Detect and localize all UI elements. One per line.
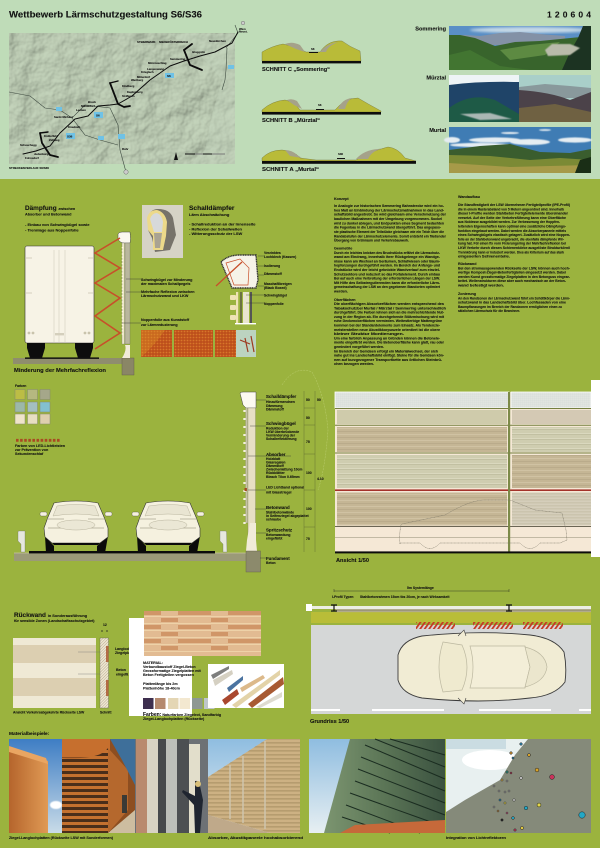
section label B: SCHNITT B „Mürztal“ bbox=[262, 118, 320, 124]
dimension lines: 50 bbox=[317, 398, 321, 402]
text block: Konzept: nen auf kurzgezogener Transportkette aus örtlichen Steinbrü- bbox=[334, 358, 443, 362]
dimension: Systemlänge bbox=[332, 586, 509, 599]
chart: Schnitt B Mürztal bbox=[262, 98, 381, 124]
annotation: wall labels: Mehrfache Reflexion zwischen bbox=[141, 290, 195, 294]
text block: Konzept: mente eingefärbt werden. Die Betonoberfläche kann glatt, rau oder bbox=[334, 341, 445, 345]
place names: Judenburg bbox=[34, 152, 49, 156]
section: rear wall: 12 bbox=[103, 623, 107, 627]
annotation: wall layers: Rückblätter bbox=[266, 471, 285, 475]
text block: Konzept: nisse kann am Wechsel an Geräumen, Schlafwiesen oder Baum- bbox=[334, 259, 441, 263]
bollards bbox=[18, 531, 227, 552]
chart: Schnitt C Sommering bbox=[262, 41, 361, 73]
text block: Konzept: kommen bei der Standardelemente zum Einsatz. Als Tendenzie- bbox=[334, 324, 441, 328]
text block: Wandaufbau: dieser I-Profile werden Stahlbeton Fertigteilelemente übereinander bbox=[458, 212, 569, 216]
panel: material: Grossformatige Ziegelplatten mit bbox=[143, 669, 202, 673]
chart: Schnitt A Murtal bbox=[262, 147, 416, 173]
heading: Rückwand bbox=[14, 612, 95, 623]
road slab bbox=[13, 357, 134, 375]
place names bbox=[20, 39, 226, 160]
place names: Wartberg bbox=[131, 78, 143, 82]
text block: Konzept: wird zu dunkel ablegen, und Endpunkten eines Segment bedachten bbox=[333, 221, 445, 225]
text block: Wandaufbau: werden Kunst grossformatige Ziegelplatten in den Betonguss eingear- bbox=[457, 275, 571, 279]
text block: Konzept: gemeinschaftung der LSW an den gegebenen Standorten optimiert bbox=[334, 285, 441, 289]
annotation: wall layers: Absorber bbox=[266, 452, 286, 457]
text block: Wandaufbau: Zonierung bbox=[458, 292, 476, 296]
thin roads bbox=[9, 25, 238, 172]
place names: Bruck bbox=[88, 100, 96, 104]
section: rear wall: Beton bbox=[116, 668, 126, 672]
panel: material: Plattenhöhe 18-40cm bbox=[143, 686, 181, 690]
text block: Wandaufbau: Die Standfestigkeit der LSW übernehmen Fertigteilprofile (IPE-Profil) bbox=[458, 203, 571, 207]
car top view bbox=[398, 630, 566, 704]
text block: Konzept: Geometrie bbox=[334, 246, 352, 250]
text block: Konzept: schaftsbild angestrebt. So wird gleichsam eine Verschmelzung der bbox=[334, 213, 447, 217]
annotation: wall labels: Noppenfolie aus Kunststoff bbox=[141, 318, 190, 322]
photo: green louvres bbox=[309, 739, 445, 833]
place names: Gloggnitz bbox=[192, 50, 205, 54]
place names: Langenwang bbox=[147, 67, 164, 71]
text block: Wandaufbau: folie an der Stahlbetonwand angebracht, die ebenfalls dämpfende Wir- bbox=[458, 237, 565, 241]
annotation: wall layers: Beton bbox=[266, 561, 276, 565]
elevation: Ansicht 1/50 bbox=[335, 392, 591, 553]
panel: material: Verbundbaustoff Ziegel-Beton bbox=[143, 665, 196, 669]
route badges: S6 bbox=[96, 114, 100, 118]
annotation: wall layers: Dämmstoff bbox=[266, 464, 285, 468]
text block: Wandaufbau: Rückwand bbox=[458, 262, 477, 266]
place names: Scheuchegg bbox=[20, 143, 37, 147]
text block: Konzept: zung in der Region ab. Ein durchgehende Stützmischung wird mit bbox=[334, 315, 445, 319]
annotation: wall layers: Betonwand bbox=[266, 505, 290, 510]
detail: damper section bbox=[216, 255, 258, 324]
text block: Wandaufbau: aus Noblesse ausgebildet werden. Zur Verbesserung der Hoppfen- bbox=[458, 220, 561, 224]
project number: 120604 bbox=[547, 10, 591, 20]
caption: Grundriss: Grundriss 1/50 bbox=[310, 719, 349, 725]
dimension lines: 75 bbox=[306, 440, 310, 444]
text block: Wandaufbau: LKW Verkehr durch diesen Schienenkörbe ausgelöste Strukturkörnil bbox=[458, 246, 570, 250]
heading: Schalldämpfer: Schalldämpfer bbox=[189, 205, 235, 212]
text block: Wandaufbau: kung hat. Für einen fix vorn Fixierungsring der Mehrfachreflexion bei bbox=[458, 242, 566, 246]
I-profile posts bbox=[331, 605, 512, 611]
text block: Wandaufbau: An den Randzonen der Lärmschutzwand führt ein Schüttkörper die Lärm- bbox=[458, 296, 571, 300]
annotation: wall layers: Schallreflektierung bbox=[266, 437, 297, 441]
heading: Rückwand: für sensible Zonen (Landschaftsschutzgebiet) bbox=[14, 619, 95, 623]
route badges: S36 bbox=[67, 134, 73, 138]
section: rear wall bbox=[100, 623, 131, 714]
annotation: wall layers: in Seifenziegel abgeplattet bbox=[266, 514, 309, 518]
annotation: wall labels: Schwingbügel zur Minderung bbox=[141, 278, 192, 282]
text block: Wandaufbau: beitet. Wellenstrukturen diese aber auch mechanisch an der Beton- bbox=[458, 279, 567, 283]
car front 2 bbox=[132, 501, 204, 553]
panel: header band bbox=[0, 0, 600, 179]
annotation: damper labels: Lochblech (Kassen) bbox=[264, 255, 296, 259]
dimension lines: 50 bbox=[306, 398, 310, 402]
map caption: STRECKENVERLAUF S6/S36 bbox=[9, 166, 49, 170]
text block: Konzept: die Fugenbau in die Lärmschutzwand übergeführt. Das angepass- bbox=[334, 226, 442, 230]
map endpoint: Graz bbox=[124, 170, 128, 174]
dimension lines: 50 bbox=[306, 416, 310, 420]
panel: material bbox=[129, 618, 202, 716]
chart: Schnitt C Sommering: S6 bbox=[311, 47, 315, 51]
map endpoint: Wien bbox=[239, 21, 248, 34]
place names: St.Marein bbox=[122, 94, 135, 98]
text block: Konzept: Oberflächen bbox=[334, 298, 356, 302]
text block: Wandaufbau: Wandaufbau bbox=[458, 195, 481, 199]
annotation: wall layers: LKW überbrückende bbox=[266, 430, 299, 434]
annotation: wall layers: Spritzschutz bbox=[266, 528, 293, 532]
heading: Schalldämpfer bbox=[189, 205, 256, 236]
text block: Konzept: nahe gut ins Landschaftsbild einfügt. Steine für die Gemüsen kön- bbox=[334, 354, 445, 358]
heading: Dämpfung: - Trennlage aus Noppenfolie bbox=[25, 228, 79, 232]
annotation: wall layers: Reduktion der bbox=[266, 426, 289, 430]
annotation: wall layers: mit Glasstriegel bbox=[266, 490, 291, 494]
route badges: S6 bbox=[167, 74, 171, 78]
caption: Absorber: Absorber, Akustikpaneele hochabsorbierend bbox=[208, 836, 303, 840]
text block: Konzept: meisterstellen neue Akustikkorpuszele orientiert ist die obere bbox=[334, 328, 440, 332]
annotation: wall layers: Dämmung bbox=[266, 404, 283, 408]
swatches: brick colours: Ziegel-Langlochplatten (Rückseite) bbox=[143, 717, 205, 721]
LED light strip key: Sekundenschlaf bbox=[15, 452, 44, 456]
annotation: wall layers: Stahlbetonwände bbox=[266, 510, 294, 514]
annotation: damper labels: Noppenfolie bbox=[264, 302, 284, 306]
LED light strip key: Farben von LED-Lichtleisten bbox=[15, 444, 66, 448]
text block: Wandaufbau: funktion eingebaut werden. Dabei werden die Absorberpaneele mittels bbox=[458, 229, 566, 233]
annotation: wall layers: Schwingbügel bbox=[266, 421, 296, 426]
text block: Wandaufbau: die in einem Rasterabstand von 5 Metern angeordnet sind. Innerhalb bbox=[458, 207, 565, 211]
annotation: wall layers: Hinzufürmendnen bbox=[266, 400, 295, 404]
annotation: wall layers: schraube bbox=[266, 518, 281, 522]
heading: Schalldämpfer: Lärm Abschwächung bbox=[189, 212, 230, 217]
lane markings bbox=[311, 709, 591, 711]
section label A: SCHNITT A „Murtal“ bbox=[262, 167, 319, 173]
color swatches: Farben: Farben bbox=[15, 384, 26, 388]
text block: Konzept: werden. bbox=[333, 290, 348, 294]
text block: Wandaufbau: sätzlichen Lärmschutz für die Bewohner. bbox=[458, 309, 520, 313]
chart: Schnitt A Murtal: S36 bbox=[338, 152, 343, 156]
text block: Konzept: gemindert vorgeführt werden. bbox=[334, 345, 384, 349]
label: Mürztal: Mürztal bbox=[426, 76, 446, 82]
annotation: wall layers: Dämmstoff bbox=[266, 408, 285, 412]
swatches: brick colours bbox=[143, 698, 221, 721]
map endpoint: Wien: Wien bbox=[239, 27, 246, 31]
label: Sommering: Sommering bbox=[415, 26, 447, 32]
place names: Kraubath bbox=[68, 125, 81, 129]
annotation: wall layers bbox=[248, 394, 309, 565]
photo: tan absorber wall bbox=[208, 739, 300, 833]
photo: brick louvres bbox=[62, 739, 135, 833]
heading: Dämpfung bbox=[25, 205, 90, 232]
panel: material: Beton Fertigteilen vergossen bbox=[143, 673, 195, 677]
text block: Wandaufbau: Trennkörung kann er induziert werden. Dies als Kriterium auf das stark bbox=[458, 250, 565, 254]
place names: Fohnsdorf bbox=[25, 156, 39, 160]
text block: Konzept: ruhe Deckenoberflächen vermieden. Weitestlerbige Mattengrüne bbox=[334, 319, 442, 323]
place names: Niklasdorf bbox=[81, 104, 95, 108]
photo: facade with light points bbox=[446, 739, 591, 833]
text block: Wandaufbau: wand befestigt werden. bbox=[457, 284, 504, 288]
annotation: wall layers: Fundament bbox=[266, 556, 290, 561]
wall section full height bbox=[240, 392, 260, 572]
annotation: wall layers: Bleach Tilon 0.65mm bbox=[266, 475, 300, 479]
annotation: wall layers: Schalldämpfer bbox=[266, 394, 297, 399]
annotation: wall labels bbox=[122, 278, 195, 327]
annotation: damper labels: Maschafilbreigen bbox=[264, 282, 292, 286]
annotation: damper labels: (Black Boxed) bbox=[264, 286, 287, 290]
place names: NIEDERÖSTERREICH bbox=[159, 39, 188, 44]
place names: Leoben bbox=[76, 108, 86, 112]
chart: Schnitt B Mürztal: S6 bbox=[318, 103, 322, 107]
dimension lines: 4.00 bbox=[317, 477, 324, 481]
photo: Sommering bbox=[449, 26, 591, 70]
photo: brick elements bbox=[208, 664, 284, 708]
text block: Wandaufbau: Baumpflanzungen im Bereich der Randzonen ermöglichen einen zu bbox=[458, 305, 563, 309]
section: rear wall: Langloch bbox=[115, 647, 131, 651]
place names: Kindberg bbox=[122, 84, 135, 88]
place names: Mürzzuschlag bbox=[148, 61, 167, 65]
red hatched zones bbox=[416, 622, 563, 629]
annotation: damper labels bbox=[246, 251, 296, 306]
dimension lines: 100 bbox=[306, 507, 312, 511]
text block: Wandaufbau: wertige Kompost-Ziegel-Betonfertigteilen eingesetzt werden. Dabei bbox=[457, 271, 566, 275]
annotation: wall layers: LED Lichtband optional bbox=[266, 486, 304, 490]
place names: STEIERMARK bbox=[137, 40, 156, 44]
annotation: wall layers: Zwischenlattung 10cm bbox=[266, 468, 302, 472]
heading: Dämpfung: Dämpfung zwischen bbox=[25, 205, 76, 212]
text block: Konzept: ste plastische Element der Teilstücke gleichsam wie ein Teich über die bbox=[334, 230, 444, 234]
text block: Konzept: wand am Eindrang, innerhalb ihrer Rückgelenge ein Wandge- bbox=[333, 255, 441, 259]
text block: Konzept: hopfenzungen durchgeführt werden. Im Bereich der Anfangs- und bbox=[334, 264, 441, 268]
LED light strip key bbox=[15, 440, 66, 456]
place names: Sankt Michael bbox=[54, 115, 73, 119]
caption: Integration: Integration von Lichtreflektoren bbox=[446, 836, 506, 840]
text block: Konzept: Mit Hilfe des Selbstregulierenden kann die erforderliche Lärm- bbox=[334, 281, 441, 285]
annotation: wall layers: Betonwandung bbox=[266, 533, 290, 537]
noise wall section bbox=[118, 232, 130, 358]
text block: Wandaufbau: Bei den stromausgewenden Rückseite der LSW, können auch hoch- bbox=[458, 266, 571, 270]
list: - Einbau von Schwingbügel sowie bbox=[25, 222, 90, 227]
route badges bbox=[56, 65, 234, 140]
place names: Semmering bbox=[170, 57, 186, 61]
road base: section bbox=[14, 551, 246, 561]
place names: Kapfenberg bbox=[127, 90, 143, 94]
swatches: brick colours: Farben: Naturfarben Ziegelrot, Sandfarbig bbox=[143, 712, 221, 718]
text block: Konzept: Bei auf auch eine Verbreitung der erforderlichen Längen der LSW. bbox=[334, 277, 440, 281]
annotation: wall labels: zur Lärmreduzierung bbox=[141, 323, 178, 327]
heading: Schalldämpfer: - Reflexion der Schallwellen bbox=[189, 226, 242, 232]
text block: Konzept: kleiner Struktur Montierungen. bbox=[334, 332, 404, 336]
caption: Ziegel: Ziegel-Langlochplatten (Rückseite LSW mit Sonderformen) bbox=[9, 836, 113, 840]
heading: Schalldämpfer: - Witterungsschutz der LSW bbox=[189, 231, 243, 236]
dimension lines bbox=[304, 391, 324, 552]
text block: Konzept: hes Maß an Einbindung der Lärmschutzmaßnahmen in das Land- bbox=[334, 208, 445, 212]
place names: Zeltweg bbox=[49, 138, 60, 142]
white corner block bbox=[591, 380, 600, 557]
place names: Neunkirchen bbox=[209, 39, 226, 43]
photo: silencer model bbox=[142, 205, 183, 258]
text block: Konzept: Endstücke wird der leicht geknickte Wandverlauf zum einziel- bbox=[334, 268, 441, 272]
truck rear view bbox=[25, 246, 94, 358]
place names: Krieglach bbox=[141, 70, 154, 74]
text block: Konzept: Durch ein leichtes knicken des Bruchstücks erfährt die Lärmschutz- bbox=[334, 251, 441, 255]
heading: Rückwand: Rückwand in Sonderausführung bbox=[14, 612, 88, 619]
label: Murtal: Murtal bbox=[429, 128, 446, 134]
place names: Mitterdorf bbox=[137, 75, 150, 79]
heading: Materialbeispiele: Materialbeispiele: bbox=[9, 731, 50, 737]
text block: Konzept: durchgeführt. Die Farben lehnen sich an die mehrschichtende Nut- bbox=[334, 311, 445, 315]
text block: Konzept: Um eine farblich Anpassung an Gründen können die Betonele- bbox=[334, 336, 441, 340]
material samples: orange foil bbox=[141, 330, 256, 357]
annotation: wall labels: Lärmschutzwand und LKW bbox=[141, 294, 189, 298]
text block: Konzept: Im Bereich der Gemüsen erfolgt ein Materialwechsel, der sich bbox=[334, 349, 439, 353]
annotation: wall layers: eingefärbt bbox=[266, 536, 283, 540]
annotation: damper labels: Isolierung bbox=[264, 264, 280, 268]
text block: Konzept: baulichen Maßnahmen mit der Umgebung vorgenommen. Sockel bbox=[334, 217, 442, 221]
heading: Dämpfung: Absorber und Betonwand bbox=[25, 212, 72, 216]
dimension lines: 75 bbox=[306, 537, 310, 541]
arrows: multiple reflection bbox=[95, 238, 120, 349]
dimension: Systemlänge: I-Profil Typen bbox=[332, 595, 353, 599]
text block: Konzept: Tabakschutzbei Murtal / Mürztal / Semmering unterschiedlich bbox=[334, 306, 447, 310]
photo: Murtal bbox=[444, 127, 592, 173]
section label C: SCHNITT C „Sommering“ bbox=[262, 67, 330, 73]
section: rear wall: Ziegelpla bbox=[115, 651, 130, 655]
text block: Wandaufbau: eingeseilen Schienenteile. bbox=[458, 255, 510, 259]
photo: panels with person bbox=[135, 739, 208, 833]
dimension: Systemlänge: Stahlbetonrahmen 15cm tbs 20cm, je nach Wirksamkeit bbox=[360, 595, 450, 599]
elevation: rear wall bbox=[13, 638, 110, 714]
text block: Wandaufbau: schutzwand in das Landschaftsbild über. Lochfassaden von eine bbox=[458, 301, 566, 305]
text block: Konzept: chen bezogen werden. bbox=[334, 362, 374, 366]
motorway route bbox=[23, 32, 238, 157]
annotation: wall layers: Holzblatt bbox=[266, 457, 281, 461]
text block: Wandaufbau: versetzt. Auf der Seite der Verkehrsführung kann eine Oberfläche bbox=[458, 216, 566, 220]
panel: material: Plattenlänge bis 2m bbox=[143, 682, 178, 686]
list: - Schallreduktion an der Innenseite bbox=[189, 222, 256, 226]
annotation: damper labels: Schwingbügel bbox=[264, 294, 287, 298]
text block: Konzept: Randabstufen der Lärmschutzelemente. Somit entsteht ein fließender bbox=[334, 234, 447, 238]
text block: Konzept: Die oberflächigen Absorberflächen werden entsprechend des bbox=[334, 302, 444, 306]
place names: Rohr bbox=[122, 147, 129, 151]
annotation: wall labels: der maximalen Schallpegels bbox=[141, 282, 190, 286]
place names: Knittelfeld bbox=[44, 134, 58, 138]
photo: brick corner bbox=[9, 739, 62, 833]
brick panel sample bbox=[144, 611, 261, 656]
section: rear wall: eingefä bbox=[116, 672, 128, 676]
annotation: wall layers: Verminderung der bbox=[266, 434, 296, 438]
text block: Konzept: Konzept bbox=[334, 197, 349, 201]
text block: Konzept bbox=[333, 197, 447, 366]
annotation: damper labels: Dämmstoff bbox=[264, 272, 283, 276]
text block: Wandaufbau: eines Schwingbügels elastisch gelagert. Zusätzlich wird eine Noppen- bbox=[458, 233, 571, 237]
text block: Konzept: Übergang von Grünraum und Verkehrsbauwerk. bbox=[334, 238, 409, 243]
plan view: Grundriss bbox=[306, 604, 591, 714]
annotation: wall layers: Glasregalen bbox=[266, 460, 285, 464]
dimension: Systemlänge: 5m Systemlänge bbox=[407, 586, 434, 590]
text block: Konzept: In Analogie zur historischen Semmering Bahnstrecke wird ein ho- bbox=[334, 204, 445, 208]
decorative tree outline bbox=[282, 370, 328, 490]
car front 1 bbox=[40, 501, 112, 553]
caption: Minderung: Minderung der Mehrfachreflexion bbox=[14, 368, 107, 374]
section: rear wall: Schnitt bbox=[100, 710, 112, 714]
dimension lines: 100 bbox=[306, 471, 312, 475]
text block: Wandaufbau: leitenden Eigenschaften kann optimal eine zusätzliche Dämpfungs- bbox=[458, 224, 567, 228]
annotation: damper labels: Verzinktes bbox=[264, 251, 281, 255]
car outline bbox=[400, 500, 567, 548]
caption: Ansicht: Ansicht 1/50 bbox=[336, 558, 369, 564]
panel: material: MATERIAL: bbox=[143, 661, 163, 665]
LED light strip key: zur Prävention von bbox=[15, 448, 49, 452]
photo: Mürztal bbox=[449, 75, 591, 122]
title: Wettbewerb Lärmschutzgestaltung S6/S36 bbox=[9, 10, 202, 20]
text block: Konzept: Schutzsektore und reduziert so das Portalelement. Durch einbau bbox=[334, 272, 441, 276]
map endpoint: Wien: Neust. bbox=[239, 30, 248, 34]
rear wall caption: Ansicht Verkehrsabgekehrte Rückseite LSW bbox=[13, 710, 85, 714]
north arrow and scale bbox=[174, 152, 225, 160]
text block: Wandaufbau bbox=[457, 195, 571, 313]
map: route overview bbox=[9, 21, 248, 174]
color swatches: Farben bbox=[15, 384, 50, 424]
